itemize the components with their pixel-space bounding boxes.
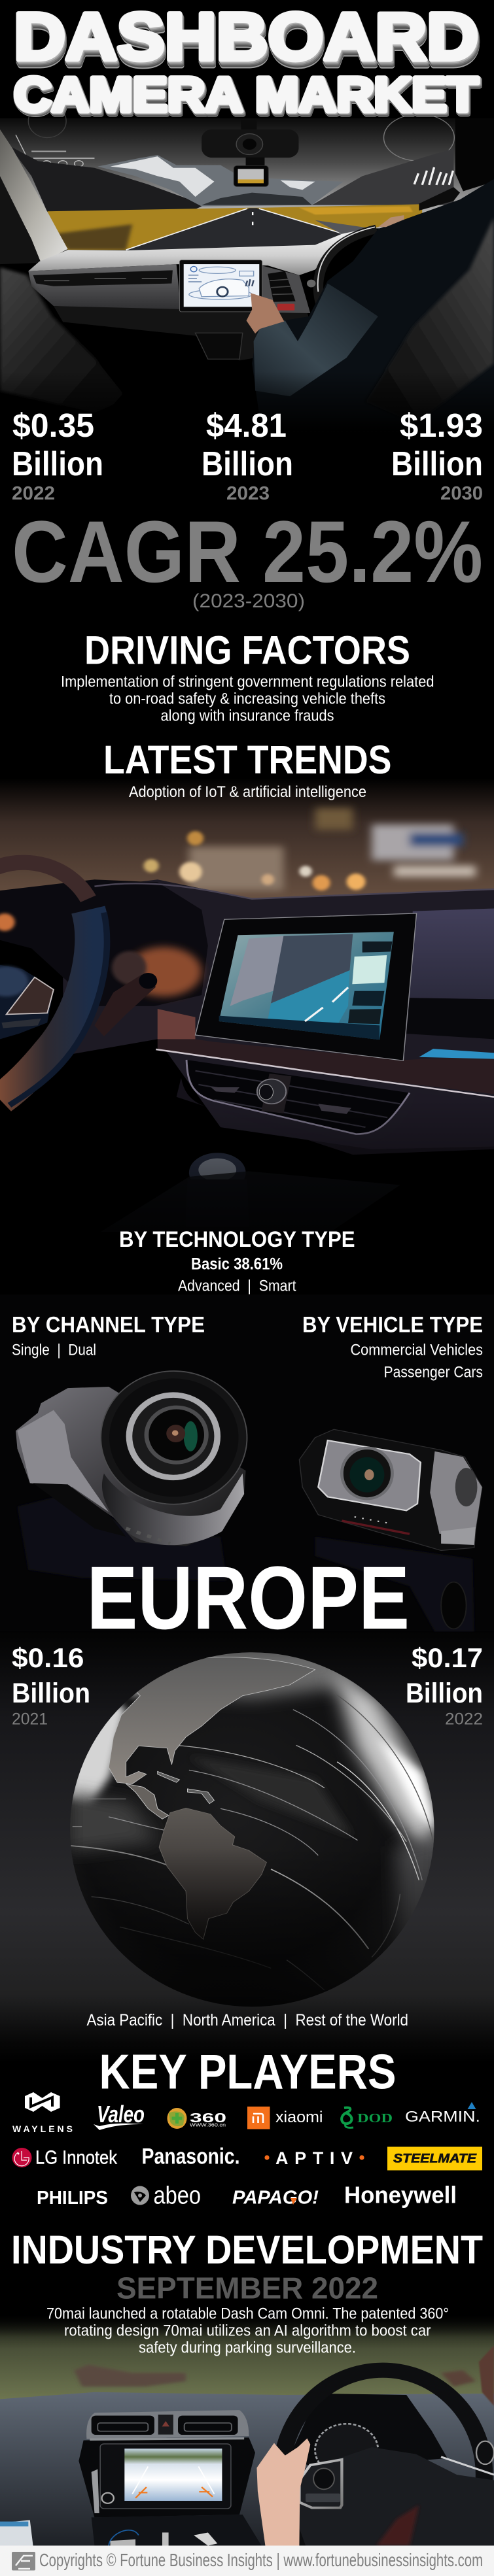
logo: Waylens: WAYLENS	[12, 2124, 73, 2134]
view through windshield	[0, 2315, 494, 2400]
instrument hood	[290, 2394, 448, 2469]
dashboard	[0, 2392, 494, 2546]
Europe region heading: EUROPE	[86, 1548, 410, 1648]
globe latitude streaks	[71, 1693, 433, 1990]
dashboard top	[28, 227, 375, 275]
industry development section: SEPTEMBER 2022	[116, 2271, 378, 2305]
dash cam on mirror	[234, 158, 268, 186]
Caribbean islands	[158, 1771, 214, 1804]
globe backdrop	[0, 1632, 494, 2063]
by technology type segment: BY TECHNOLOGY TYPE	[119, 1227, 355, 1252]
by vehicle type segment: Commercial Vehicles	[351, 1342, 483, 1359]
driver shoulder at edge	[479, 2345, 494, 2406]
HUD bars	[414, 167, 453, 185]
logo: Honeywell: Honeywell	[344, 2181, 457, 2209]
infotainment screen	[196, 913, 417, 1060]
logo: 360: 360	[190, 2111, 226, 2126]
by vehicle type segment	[302, 1313, 483, 1381]
Europe stat 2021: Billion	[12, 1678, 90, 1709]
logo: abeo: abeo	[153, 2182, 201, 2210]
photo: car interior with infotainment screen	[0, 778, 494, 1237]
title line 2: CAMERA MARKET	[14, 67, 478, 122]
logo: 360	[168, 2108, 226, 2129]
logo: Philips: PHILIPS	[37, 2188, 108, 2209]
windshield sky	[0, 118, 494, 228]
road	[126, 208, 344, 250]
latest trends section: LATEST TRENDS	[103, 737, 391, 782]
by vehicle type segment: BY VEHICLE TYPE	[302, 1313, 483, 1338]
market size stat 2023	[202, 407, 293, 504]
fade to black	[0, 1100, 494, 1237]
driving factors section: Implementation of stringent government regulations related	[61, 673, 434, 690]
Europe stat 2021: $0.16	[12, 1642, 84, 1673]
globe with the Americas	[63, 1646, 441, 2010]
driving factors section: along with insurance frauds	[161, 707, 334, 724]
other regions list: Asia Pacific | North America | Rest of the World	[86, 2011, 408, 2029]
air vents	[86, 2410, 249, 2439]
fade at top of photo	[0, 2315, 494, 2337]
logo: DOD: DOD	[357, 2111, 393, 2126]
logo: LG Innotek: LG Innotek	[35, 2147, 117, 2168]
market size stat 2023: $4.81	[206, 407, 287, 444]
wheel hub	[293, 2441, 494, 2546]
driving factors section: to on-road safety & increasing vehicle thefts	[109, 690, 385, 707]
industry development section	[11, 2228, 483, 2356]
by channel type segment: Single | Dual	[12, 1342, 96, 1359]
Europe stat 2022: $0.17	[412, 1642, 483, 1673]
mountains	[9, 146, 453, 212]
right air vent	[262, 265, 310, 313]
market size stat 2030: $1.93	[400, 407, 483, 444]
market size stat 2030: Billion	[391, 445, 483, 483]
rear camera display	[124, 2449, 222, 2501]
camera reflections	[17, 1493, 474, 1632]
logo: Panasonic: Panasonic.	[141, 2144, 239, 2169]
logo: Xiaomi	[247, 2107, 323, 2129]
CAGR figure: (2023-2030)	[192, 590, 305, 612]
seats in silhouette	[0, 218, 494, 424]
camera left	[16, 1371, 247, 1546]
blurred street bokeh	[0, 778, 494, 905]
Europe stat 2022: 2022	[445, 1710, 483, 1729]
air vent with knob	[177, 1060, 494, 1155]
lower console	[0, 2515, 262, 2546]
logo: Valeo: Valeo	[97, 2101, 145, 2127]
logo: Steelmate: STEELMATE	[393, 2152, 477, 2165]
by technology type segment: Advanced | Smart	[178, 1278, 296, 1295]
driver head and body	[252, 118, 494, 432]
logo: Valeo	[94, 2101, 145, 2130]
driving factors section: DRIVING FACTORS	[84, 628, 410, 672]
icon: Fortune Business Insights logo	[12, 2552, 35, 2571]
logo: Garmin: GARMIN.	[405, 2108, 480, 2125]
industry development section: safety during parking surveillance.	[139, 2339, 356, 2356]
driving factors section	[61, 628, 434, 724]
center console	[79, 2437, 255, 2517]
market size stat 2022: 2022	[12, 483, 55, 504]
Central America	[126, 1784, 169, 1819]
North America	[109, 1657, 315, 1784]
South America	[159, 1808, 266, 1939]
by channel type segment: BY CHANNEL TYPE	[12, 1313, 205, 1338]
golden field	[47, 204, 422, 250]
market size stat 2030: 2030	[440, 483, 483, 504]
key players logos	[12, 2092, 482, 2210]
steering wheel	[281, 2370, 484, 2576]
key players heading: KEY PLAYERS	[99, 2044, 397, 2099]
title line 1: DASHBOARD	[14, 0, 478, 74]
Europe stat 2022: Billion	[406, 1678, 483, 1709]
HUD overlay gauges	[16, 105, 454, 242]
driver hand on wheel	[256, 2439, 310, 2546]
logo: abeo	[131, 2182, 201, 2210]
instrument cluster glow	[0, 913, 202, 996]
market size stat 2022: $0.35	[12, 407, 94, 444]
globe shadow	[92, 1854, 429, 2007]
steering wheel rim	[0, 862, 107, 1105]
by vehicle type segment: Passenger Cars	[383, 1364, 483, 1381]
footer copyright bar	[0, 2546, 494, 2576]
hero photo: driver touching dashboard screen	[0, 105, 494, 432]
studio backdrop	[0, 1295, 494, 1632]
windshield pillar	[0, 129, 68, 263]
logo: 360: WWW.360.cn	[190, 2124, 226, 2127]
industry development section: 70mai launched a rotatable Dash Cam Omni. The patented 360°	[46, 2305, 449, 2322]
touch screen tablet	[179, 260, 262, 312]
by channel type segment	[12, 1313, 205, 1359]
Europe stat 2021	[12, 1642, 90, 1729]
latest trends section	[103, 737, 391, 801]
logo: Papago: PAPAGO!	[232, 2188, 319, 2209]
driver arm and sleeve	[254, 284, 378, 396]
market size stat 2022	[12, 407, 103, 504]
market size stat 2023: Billion	[202, 445, 293, 483]
camera right	[299, 1429, 482, 1550]
globe highlights	[68, 1646, 441, 1963]
industry development section: rotating design 70mai utilizes an AI algorithm to boost car	[64, 2322, 431, 2339]
steering wheel	[307, 227, 376, 311]
logo: Aptiv: APTIV	[275, 2148, 353, 2168]
dashboard upper body	[63, 879, 494, 1149]
latest trends section: Adoption of IoT & artificial intelligence	[129, 783, 366, 801]
logo: DOD	[342, 2108, 393, 2127]
driver hand on screen	[247, 293, 284, 333]
market size stat 2030	[391, 407, 483, 504]
logo: Xiaomi: xiaomi	[275, 2109, 323, 2126]
Europe stat 2022	[406, 1642, 483, 1729]
gear shifter	[101, 1153, 400, 1232]
title	[14, 0, 478, 122]
logo: Waylens	[12, 2092, 73, 2134]
logo: Steelmate	[387, 2147, 482, 2171]
photo: two dashboard cameras	[0, 1295, 494, 1632]
trim and wood band	[156, 1009, 494, 1097]
steering column stalk	[94, 973, 157, 1036]
fade to black	[0, 371, 494, 432]
rear-view mirror	[202, 120, 298, 158]
photo: car interior with rear camera display	[0, 2322, 494, 2546]
market size stat 2023: 2023	[226, 483, 270, 504]
by technology type segment: Basic 38.61%	[191, 1255, 283, 1274]
steering wheel hub buttons	[0, 965, 54, 1039]
market size stat 2022: Billion	[12, 445, 103, 483]
logo: Garmin	[405, 2102, 480, 2125]
dashboard front	[28, 264, 181, 313]
Europe stat 2021: 2021	[12, 1710, 48, 1729]
by technology type segment	[119, 1227, 355, 1295]
